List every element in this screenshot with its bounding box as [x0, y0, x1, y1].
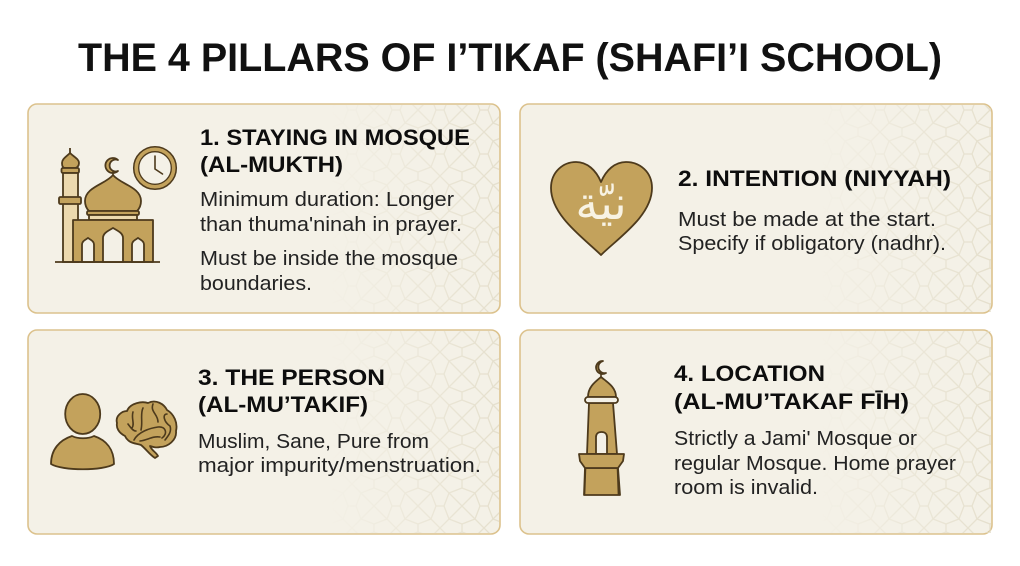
- heading: location: 4. LOCATION: [674, 361, 825, 386]
- text: intention details: Must be made at the start.: [678, 208, 936, 231]
- text: duration: [200, 188, 462, 236]
- text: person conditions: [198, 430, 481, 477]
- text: location details: room is invalid.: [674, 476, 818, 499]
- heading: the person: (AL-MU’TAKIF): [198, 392, 368, 417]
- heading: the person: 3. THE PERSON: [198, 365, 385, 390]
- heading: staying in mosque: 1. STAYING IN MOSQUE: [200, 125, 470, 150]
- background pattern: [382, 331, 499, 533]
- text: duration: Minimum duration: Longer: [200, 188, 454, 211]
- panel: 2 intention: [520, 104, 992, 313]
- text: boundaries: boundaries.: [200, 272, 312, 295]
- icon: mosque and clock: [55, 147, 176, 262]
- background pattern: [872, 331, 991, 533]
- text: duration: than thuma'ninah in prayer.: [200, 213, 462, 236]
- text: location details: regular Mosque. Home prayer: [674, 452, 956, 475]
- text: intention details: Specify if obligatory (nadhr).: [678, 232, 946, 255]
- heading: staying in mosque: (AL-MUKTH): [200, 152, 343, 177]
- panel: 4 location: [520, 330, 992, 534]
- icon: person: [51, 394, 114, 469]
- text: intention details: [678, 208, 946, 255]
- text: boundaries: [200, 247, 458, 295]
- text: location details: [674, 427, 956, 499]
- heading: location: (AL-MU’TAKAF FĪH): [674, 389, 909, 414]
- icon: brain: [117, 402, 177, 458]
- panel: 1 staying in mosque: [28, 104, 500, 313]
- title: THE 4 PILLARS OF I’TIKAF (SHAFI’I SCHOOL): [78, 36, 942, 80]
- panel: 3 the person: [28, 330, 500, 534]
- icon: minaret: [579, 361, 624, 495]
- text: person conditions: major impurity/menstruation.: [198, 454, 481, 477]
- text: boundaries: Must be inside the mosque: [200, 247, 458, 270]
- text: location details: Strictly a Jami' Mosque or: [674, 427, 917, 450]
- background pattern: [872, 105, 991, 312]
- heading: the person: [198, 365, 385, 417]
- heading: location: [674, 361, 909, 414]
- icon: heart with Arabic word: [551, 162, 652, 255]
- heading: intention: 2. INTENTION (NIYYAH): [678, 166, 951, 191]
- icon: heart with Arabic word: نيّة: [575, 176, 627, 230]
- background pattern: [382, 105, 499, 312]
- heading: staying in mosque: [200, 125, 470, 177]
- text: person conditions: Muslim, Sane, Pure from: [198, 430, 429, 453]
